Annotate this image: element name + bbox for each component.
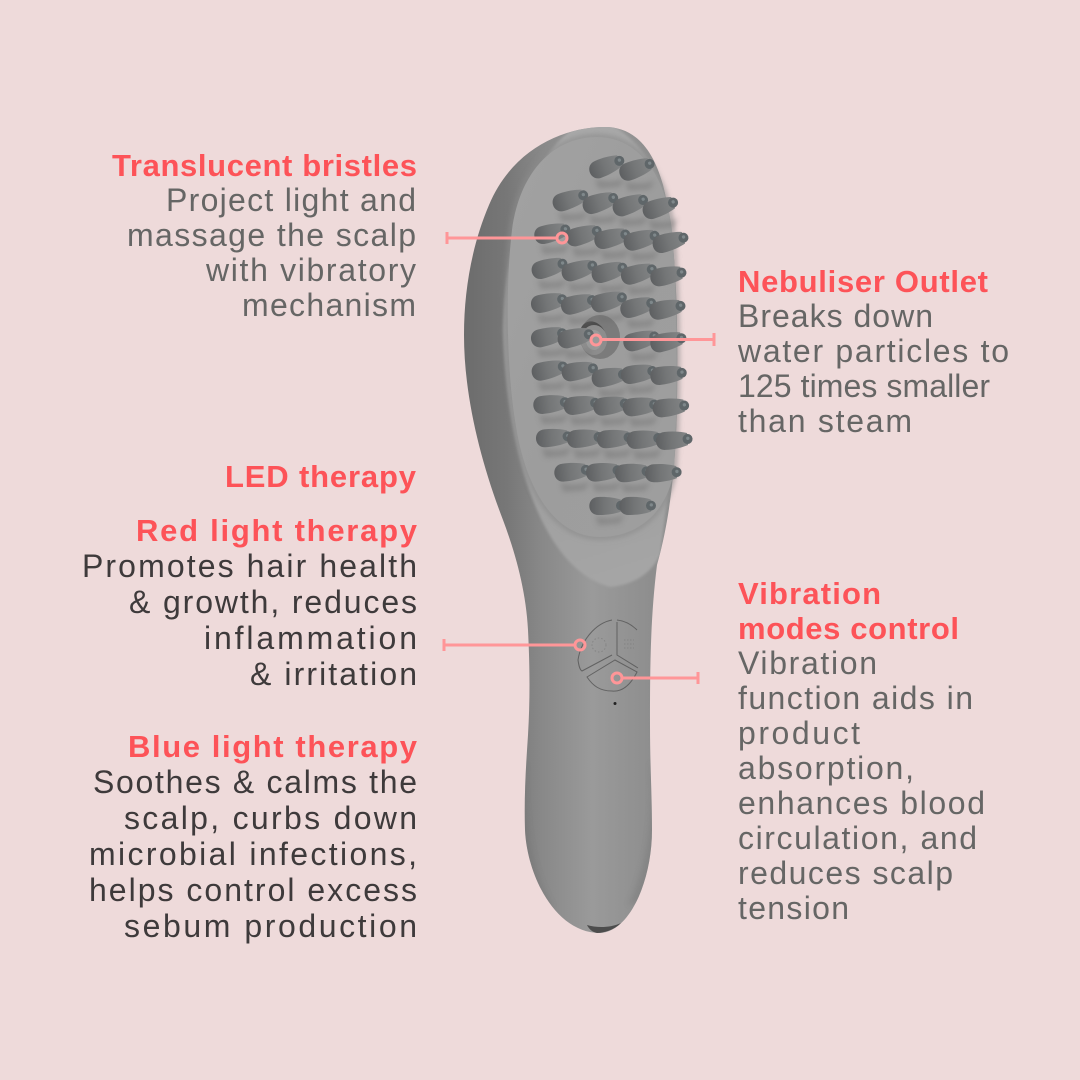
description: nebuliser outlet <box>737 298 1009 439</box>
nebuliser outlet <box>580 315 620 359</box>
description: red light therapy: inflammation <box>204 620 417 656</box>
description: vibration modes control: circulation, and <box>738 820 977 856</box>
description: red light therapy: & irritation <box>250 656 417 692</box>
heading: nebuliser outlet: Nebuliser Outlet <box>738 264 988 299</box>
brush body silhouette <box>464 127 677 933</box>
text block: nebuliser outlet <box>737 264 1009 439</box>
description: nebuliser outlet: Breaks down <box>738 298 933 334</box>
description: red light therapy: & growth, reduces <box>129 584 417 620</box>
heading: translucent bristles: Translucent bristles <box>112 148 417 183</box>
description: blue light therapy: helps control excess <box>89 872 417 908</box>
head rim <box>503 120 680 930</box>
callout line: vibration modes <box>612 672 698 684</box>
bristle shadows <box>537 178 678 525</box>
text block: vibration modes control <box>738 576 985 926</box>
brush face <box>508 137 677 537</box>
description: vibration modes control: product <box>738 715 860 751</box>
heading: red light therapy: Red light therapy <box>136 513 418 548</box>
charging port <box>587 923 621 933</box>
description: translucent bristles: Project light and <box>166 182 416 218</box>
description: vibration modes control: tension <box>738 890 849 926</box>
product: hair brush device <box>464 120 693 933</box>
description: red light therapy <box>82 548 417 692</box>
description: vibration modes control: enhances blood <box>738 785 985 821</box>
heading: vibration modes control: Vibration <box>738 576 881 611</box>
description: vibration modes control: function aids in <box>738 680 973 716</box>
callout line: LED therapy <box>444 639 585 651</box>
description: translucent bristles: mechanism <box>242 287 416 323</box>
heading: vibration modes control <box>738 576 959 646</box>
indicator light <box>614 702 616 705</box>
description: nebuliser outlet: 125 times smaller <box>738 368 990 404</box>
description: vibration modes control: Vibration <box>738 645 877 681</box>
text block: translucent bristles <box>112 148 417 323</box>
control buttons <box>578 620 638 691</box>
description: vibration modes control: reduces scalp <box>738 855 953 891</box>
description: vibration modes control <box>738 645 985 926</box>
description: blue light therapy: scalp, curbs down <box>124 800 417 836</box>
heading: blue light therapy: Blue light therapy <box>128 729 418 764</box>
callout line: nebuliser outlet <box>591 333 714 346</box>
description: translucent bristles: massage the scalp <box>127 217 416 253</box>
description: blue light therapy: sebum production <box>124 908 417 944</box>
description: red light therapy: Promotes hair health <box>82 548 417 584</box>
description: blue light therapy: microbial infections, <box>89 836 417 872</box>
heading: LED therapy: LED therapy <box>225 459 417 494</box>
description: translucent bristles <box>127 182 416 323</box>
heading: vibration modes control: modes control <box>738 611 959 646</box>
description: nebuliser outlet: than steam <box>738 403 912 439</box>
description: blue light therapy: Soothes & calms the <box>93 764 417 800</box>
text block: blue light therapy <box>89 729 418 944</box>
description: translucent bristles: with vibratory <box>205 252 416 288</box>
text block: red light therapy <box>82 513 418 692</box>
description: nebuliser outlet: water particles to <box>737 333 1009 369</box>
bristles <box>529 151 693 515</box>
description: vibration modes control: absorption, <box>738 750 914 786</box>
brush face ridge <box>508 137 677 537</box>
description: blue light therapy <box>89 764 417 944</box>
callout line: translucent bristles <box>447 232 567 244</box>
